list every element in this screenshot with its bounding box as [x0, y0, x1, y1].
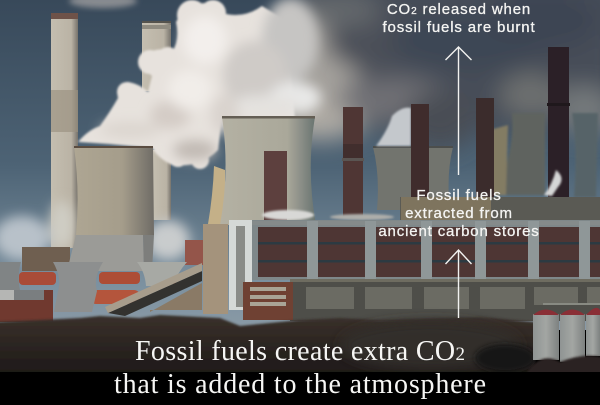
- upper building strip: [400, 197, 600, 221]
- white smoke plume: [78, 0, 321, 169]
- low smoke left: [0, 201, 190, 260]
- smoke behind right tower: [376, 108, 411, 146]
- arrow: lower: [446, 250, 472, 318]
- caption: Fossil fuels create extra CO2: [135, 336, 465, 367]
- plume shading: [100, 0, 321, 160]
- label: CO2 released: fossil fuels are burnt: [383, 19, 535, 36]
- red office building: [243, 282, 293, 320]
- label: CO2 released: CO2 released when: [387, 1, 531, 18]
- cooling tower centre: [220, 116, 316, 225]
- beige block: [203, 224, 228, 314]
- pillars: [307, 221, 590, 279]
- cooling tower right: [373, 147, 453, 210]
- brick panels: [258, 227, 600, 277]
- chimneys right: [342, 47, 570, 217]
- arrow: upper: [446, 47, 472, 175]
- label: fossil fuels extracted: extracted from: [405, 205, 513, 222]
- silos: [533, 303, 600, 362]
- lower storey: [290, 279, 600, 321]
- chimney rear: [142, 21, 171, 220]
- conveyor: [105, 263, 202, 316]
- plume body: [78, 0, 295, 169]
- small towers and red pipes: [0, 240, 203, 312]
- cooling tower left: [67, 146, 154, 271]
- beige side tower: [208, 166, 225, 224]
- white block: [229, 220, 252, 310]
- inner brown chimney: [264, 151, 287, 221]
- dark smoke clouds: [275, 0, 600, 150]
- label: fossil fuels extracted: ancient carbon stores: [378, 223, 540, 240]
- caption: that is added to the atmosphere: [114, 369, 486, 400]
- brown ground haze: [22, 247, 70, 271]
- far tower ghosts: [490, 113, 598, 197]
- trees: [0, 315, 535, 378]
- chimney left: [51, 13, 78, 248]
- red building left: [0, 290, 53, 322]
- roof steam: [262, 210, 314, 220]
- label: fossil fuels extracted: Fossil fuels: [416, 187, 502, 204]
- bottom black band: [0, 372, 600, 405]
- top wisp: [69, 0, 137, 8]
- steam puff: [544, 170, 562, 196]
- trees in front of silos: [525, 356, 600, 376]
- main facade: [252, 220, 600, 280]
